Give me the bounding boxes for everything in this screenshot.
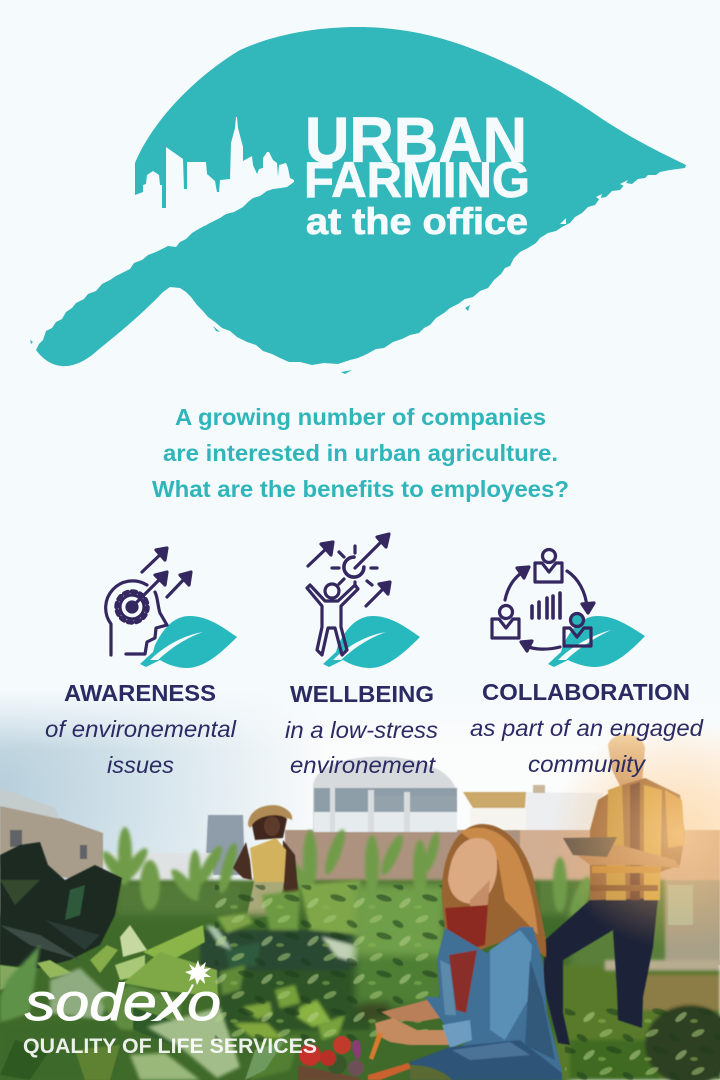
intro text: A growing number of companies (175, 404, 546, 430)
photo: distant woman with hat (233, 805, 298, 920)
logo: sodexo (25, 960, 221, 1032)
photo: right hand plants (555, 960, 720, 1080)
photo: woman with vegetables (375, 824, 562, 1080)
hero leaf with skyline cut-out (36, 27, 686, 366)
icon leaf (140, 616, 237, 668)
icon leaf (548, 616, 645, 667)
photo: garden foliage base (0, 915, 570, 1080)
photo: vegetable basket (298, 1032, 452, 1080)
icon: wellbeing person with sun (307, 534, 420, 668)
photo: leaf texture (215, 885, 720, 1080)
photo: back buildings (0, 757, 720, 965)
photo: dark kale at left (0, 842, 122, 968)
icon: collaboration cycle (492, 550, 645, 667)
icon leaf (323, 616, 420, 668)
heading: collaboration: COLLABORATION (482, 679, 690, 705)
intro text: What are the benefits to employees? (152, 476, 569, 502)
logo star (185, 960, 211, 985)
photo: bright foreground leaves (0, 925, 285, 1080)
leaf specks (30, 305, 470, 374)
text: wellbeing description: environement (290, 752, 437, 778)
text: wellbeing description (285, 717, 439, 778)
photo: center leaves (200, 880, 370, 1080)
photo: rooftop farm (0, 690, 720, 1080)
text: awareness description: of environemental (45, 716, 237, 742)
heading: wellbeing: WELLBEING (290, 681, 434, 707)
heading: awareness: AWARENESS (64, 680, 216, 706)
title: FARMING (304, 152, 530, 208)
photo: man with tablet (543, 734, 685, 1045)
text: awareness description (45, 716, 237, 778)
photo: sun glow (550, 720, 720, 950)
photo: middle right foliage (355, 885, 445, 1020)
title (304, 104, 530, 242)
text: collaboration description: community (528, 751, 647, 777)
logo: sodexo: sodexo (25, 974, 221, 1032)
tagline: QUALITY OF LIFE SERVICES (23, 1035, 317, 1058)
text: wellbeing description: in a low-stress (285, 717, 439, 743)
title: at the office (306, 201, 528, 242)
text: collaboration description (470, 715, 704, 777)
icon: awareness head with gear (106, 548, 237, 668)
intro text (152, 404, 569, 502)
photo: corn and background plants (99, 827, 665, 970)
intro text: are interested in urban agriculture. (163, 440, 558, 466)
text: collaboration description: as part of an engaged (470, 715, 704, 741)
title: URBAN (305, 104, 527, 176)
text: awareness description: issues (107, 752, 175, 778)
